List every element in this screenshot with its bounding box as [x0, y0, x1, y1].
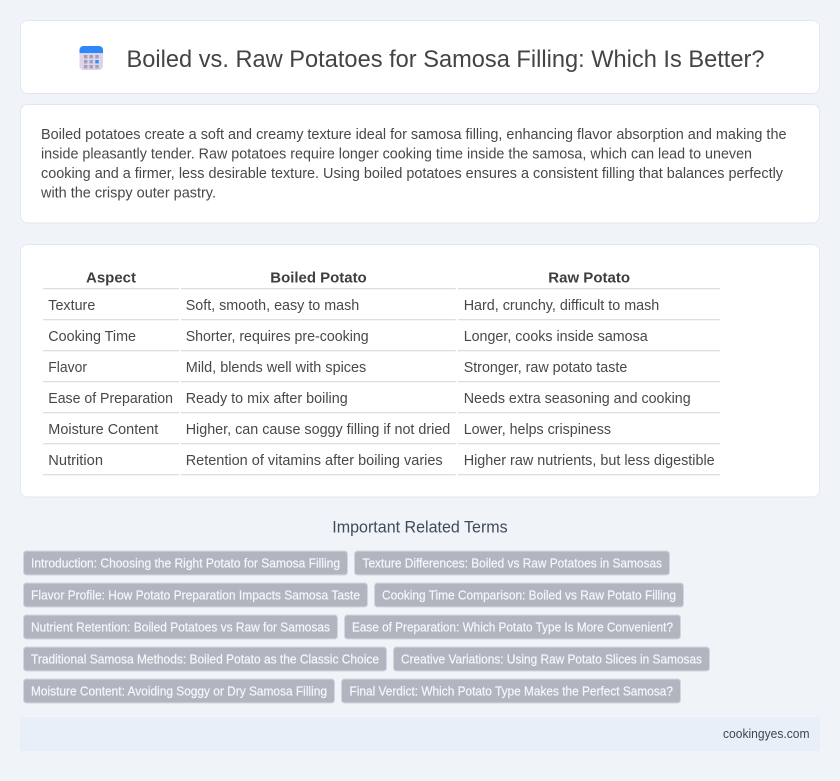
row: ease of preparation: Ease of Preparation [48, 391, 173, 407]
row: moisture content: Lower, helps crispiness [464, 422, 611, 438]
tag: flavor profile: Flavor Profile: How Potato Preparation Impacts Samosa Taste [31, 588, 360, 602]
tag: texture differences: Texture Differences: Boiled vs Raw Potatoes in Samosas [362, 556, 662, 570]
row: texture: Soft, smooth, easy to mash [186, 298, 359, 314]
tag: creative variations [394, 647, 710, 671]
intro paragraph: cooking and a firmer, less desirable texture. Using boiled potatoes ensures a consistent filling that balances perfectly [41, 166, 784, 182]
row: flavor: Flavor [48, 360, 87, 376]
tag: traditional methods [24, 647, 386, 671]
row: texture [48, 298, 659, 314]
tag: ease of preparation: Ease of Preparation: Which Potato Type Is More Convenient? [352, 620, 673, 634]
icon: calendar [80, 46, 103, 70]
row: flavor [48, 360, 627, 376]
row: nutrition: Retention of vitamins after boiling varies [186, 453, 443, 469]
footer bar [20, 717, 820, 751]
tag: texture differences [354, 551, 670, 575]
tag: final verdict: Final Verdict: Which Potato Type Makes the Perfect Samosa? [350, 684, 673, 698]
tag: final verdict [342, 679, 680, 703]
row: nutrition: Higher raw nutrients, but less digestible [464, 453, 715, 469]
row: ease of preparation [48, 391, 691, 407]
table column headers: Raw Potato [548, 270, 630, 287]
tag: nutrient retention [24, 615, 338, 639]
tag: moisture content: Moisture Content: Avoiding Soggy or Dry Samosa Filling [31, 684, 327, 698]
row: moisture content [48, 422, 611, 438]
footer source: cookingyes.com [723, 727, 810, 741]
row: cooking time: Cooking Time [48, 329, 136, 345]
tag: creative variations: Creative Variations: Using Raw Potato Slices in Samosas [401, 652, 702, 666]
table column headers [86, 270, 630, 287]
table column headers: Aspect [86, 270, 136, 287]
panel: title header [20, 20, 820, 94]
tag: nutrient retention: Nutrient Retention: Boiled Potatoes vs Raw for Samosas [31, 620, 330, 634]
row: cooking time [48, 329, 649, 345]
heading: related terms: Important Related Terms [332, 519, 508, 537]
intro paragraph [40, 127, 787, 202]
tag: moisture content [24, 679, 334, 703]
tag: cooking time comparison: Cooking Time Comparison: Boiled vs Raw Potato Filling [382, 588, 676, 602]
intro paragraph: Boiled potatoes create a soft and creamy texture ideal for samosa filling, enhancing flavor absorption and making the [41, 127, 786, 143]
row: cooking time: Longer, cooks inside samosa [464, 329, 649, 345]
related term tags [24, 551, 710, 703]
tag: introduction [24, 551, 348, 575]
panel: intro text [20, 104, 820, 223]
tag: traditional methods: Traditional Samosa Methods: Boiled Potato as the Classic Choice [31, 652, 379, 666]
panel: comparison table [20, 244, 820, 497]
tag: cooking time comparison [374, 583, 684, 607]
row: nutrition [48, 453, 715, 469]
row: cooking time: Shorter, requires pre-cooking [186, 329, 369, 345]
row: flavor: Stronger, raw potato taste [464, 360, 627, 376]
row: nutrition: Nutrition [48, 453, 103, 469]
row: ease of preparation: Ready to mix after boiling [186, 391, 348, 407]
tag: introduction: Introduction: Choosing the Right Potato for Samosa Filling [31, 556, 340, 570]
intro paragraph: inside pleasantly tender. Raw potatoes require longer cooking time inside the samosa, which can lead to uneven [41, 146, 752, 162]
tag: flavor profile [24, 583, 368, 607]
table column headers: Boiled Potato [270, 270, 367, 287]
row: flavor: Mild, blends well with spices [186, 360, 366, 376]
title: Boiled vs. Raw Potatoes for Samosa Filling: Which Is Better? [126, 46, 764, 73]
row: texture: Hard, crunchy, difficult to mash [464, 298, 659, 314]
row: moisture content: Moisture Content [48, 422, 158, 438]
row: ease of preparation: Needs extra seasoning and cooking [464, 391, 691, 407]
row: moisture content: Higher, can cause soggy filling if not dried [186, 422, 450, 438]
tag: ease of preparation [344, 615, 680, 639]
row: texture: Texture [48, 298, 95, 314]
intro paragraph: with the crispy outer pastry. [40, 186, 216, 202]
